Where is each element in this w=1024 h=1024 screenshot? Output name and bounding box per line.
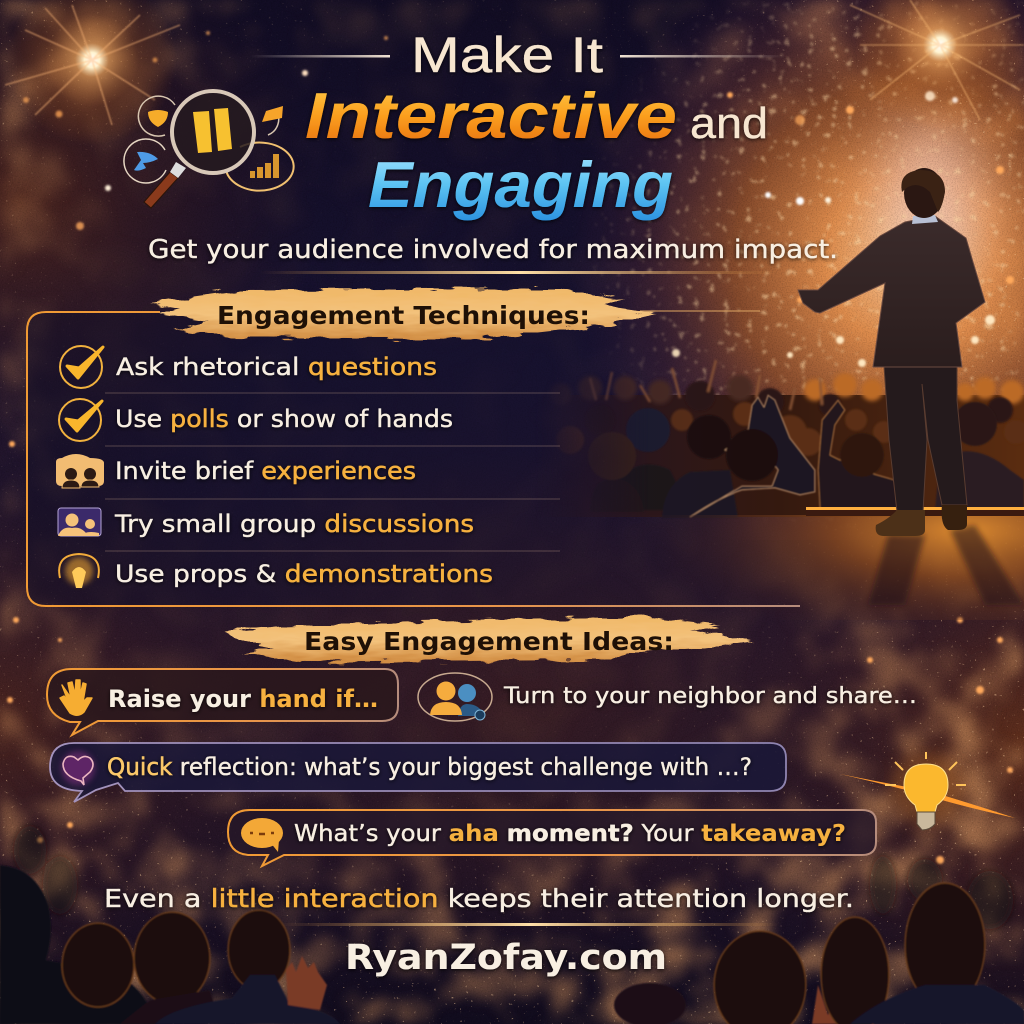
spotlight: top right [850, 0, 1024, 130]
heading banner: engagement techniques [150, 289, 655, 340]
icon: raised hand [60, 680, 92, 715]
speech bubble: quick reflection: Quick reflection: what’s your biggest challenge with …? [107, 753, 752, 781]
heading banner: easy engagement ideas [225, 617, 752, 662]
title line: Interactive and: Interactive [305, 79, 677, 152]
dividers [105, 393, 560, 551]
speech bubble: turn to your neighbor [418, 673, 917, 721]
audience foreground [0, 825, 1024, 1024]
spotlight: top left [5, 0, 180, 145]
speech bubble: quick reflection [50, 743, 786, 802]
item: polls [59, 399, 453, 441]
audience member centre [614, 931, 852, 1024]
speech bubble: aha moment [228, 810, 876, 866]
item: rhetorical questions: Ask rhetorical questions [116, 353, 437, 381]
closing line [104, 884, 854, 926]
audience member left [62, 912, 220, 1024]
speech bubble: turn to your neighbor: Turn to your neighbor and share… [503, 684, 917, 709]
item: props and demonstrations: Use props & demonstrations [115, 560, 493, 588]
item: brief experiences [56, 454, 416, 488]
heading banner: easy engagement ideas: Easy Engagement Ideas: [304, 627, 674, 656]
icon: smiling chat bubble [241, 818, 283, 852]
icon: heart bubble [61, 751, 95, 785]
raised hand left [286, 956, 327, 1010]
icon: light bulb [840, 752, 1015, 830]
item: props and demonstrations [59, 554, 493, 588]
bokeh sparkles [7, 31, 1014, 864]
item: small group discussions: Try small group discussions [114, 510, 474, 538]
icon: magnifier with engagement icons [124, 91, 294, 208]
audience member far left [0, 865, 156, 1024]
stage [540, 507, 1024, 620]
title line: Make It: Make It [411, 27, 603, 83]
title [250, 27, 785, 221]
heading banner: engagement techniques: Engagement Techniques: [217, 301, 590, 330]
speech bubble: raise your hand [47, 669, 398, 735]
audience member right [821, 883, 1024, 1024]
icon: two people [430, 682, 485, 720]
item: rhetorical questions [60, 346, 437, 388]
audience behind speaker [535, 360, 1024, 518]
speaker silhouette [798, 168, 985, 536]
title word: and: and [690, 99, 768, 148]
website: RyanZofay.com [345, 938, 667, 978]
title line: Engaging: Engaging [368, 148, 673, 221]
subtitle: Get your audience involved for maximum impact. [148, 235, 838, 265]
audience member centre left [155, 910, 340, 1024]
panel: engagement techniques [27, 289, 800, 606]
item: polls: Use polls or show of hands [115, 405, 453, 433]
speech bubble: aha moment: What’s your aha moment? Your takeaway? [294, 821, 846, 847]
speech bubble: raise your hand: Raise your hand if… [108, 685, 378, 713]
item: brief experiences: Invite brief experiences [115, 457, 416, 485]
closing line: Even a little interaction keeps their attention longer. [104, 884, 854, 913]
